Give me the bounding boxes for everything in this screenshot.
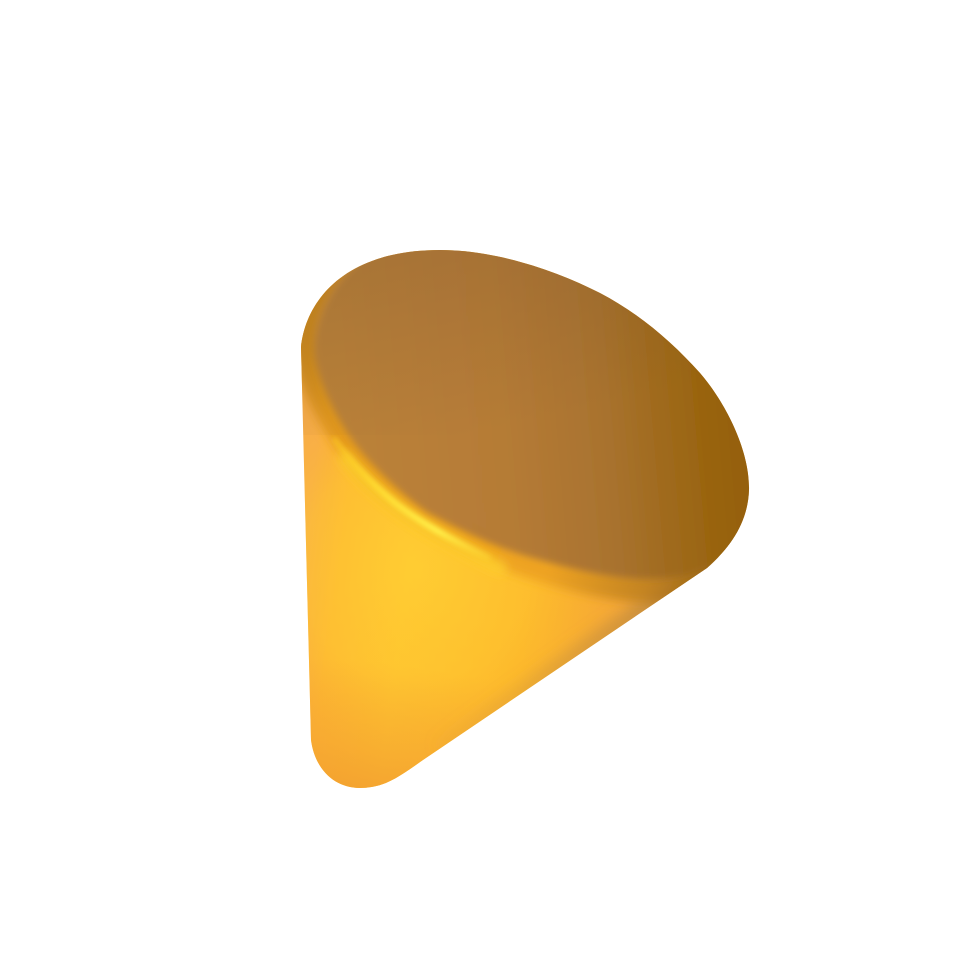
illustration: 3D golden cone [301, 250, 750, 788]
body glow [304, 450, 522, 691]
right edge shading [478, 562, 713, 722]
top face of cone [313, 250, 750, 582]
rim highlight [335, 440, 488, 557]
rim band [306, 255, 745, 588]
cone body [290, 240, 760, 800]
cone silhouette with shading [301, 250, 750, 788]
top face upper shading [301, 250, 588, 420]
tip shading [310, 686, 496, 788]
rim highlight glow [345, 458, 500, 568]
